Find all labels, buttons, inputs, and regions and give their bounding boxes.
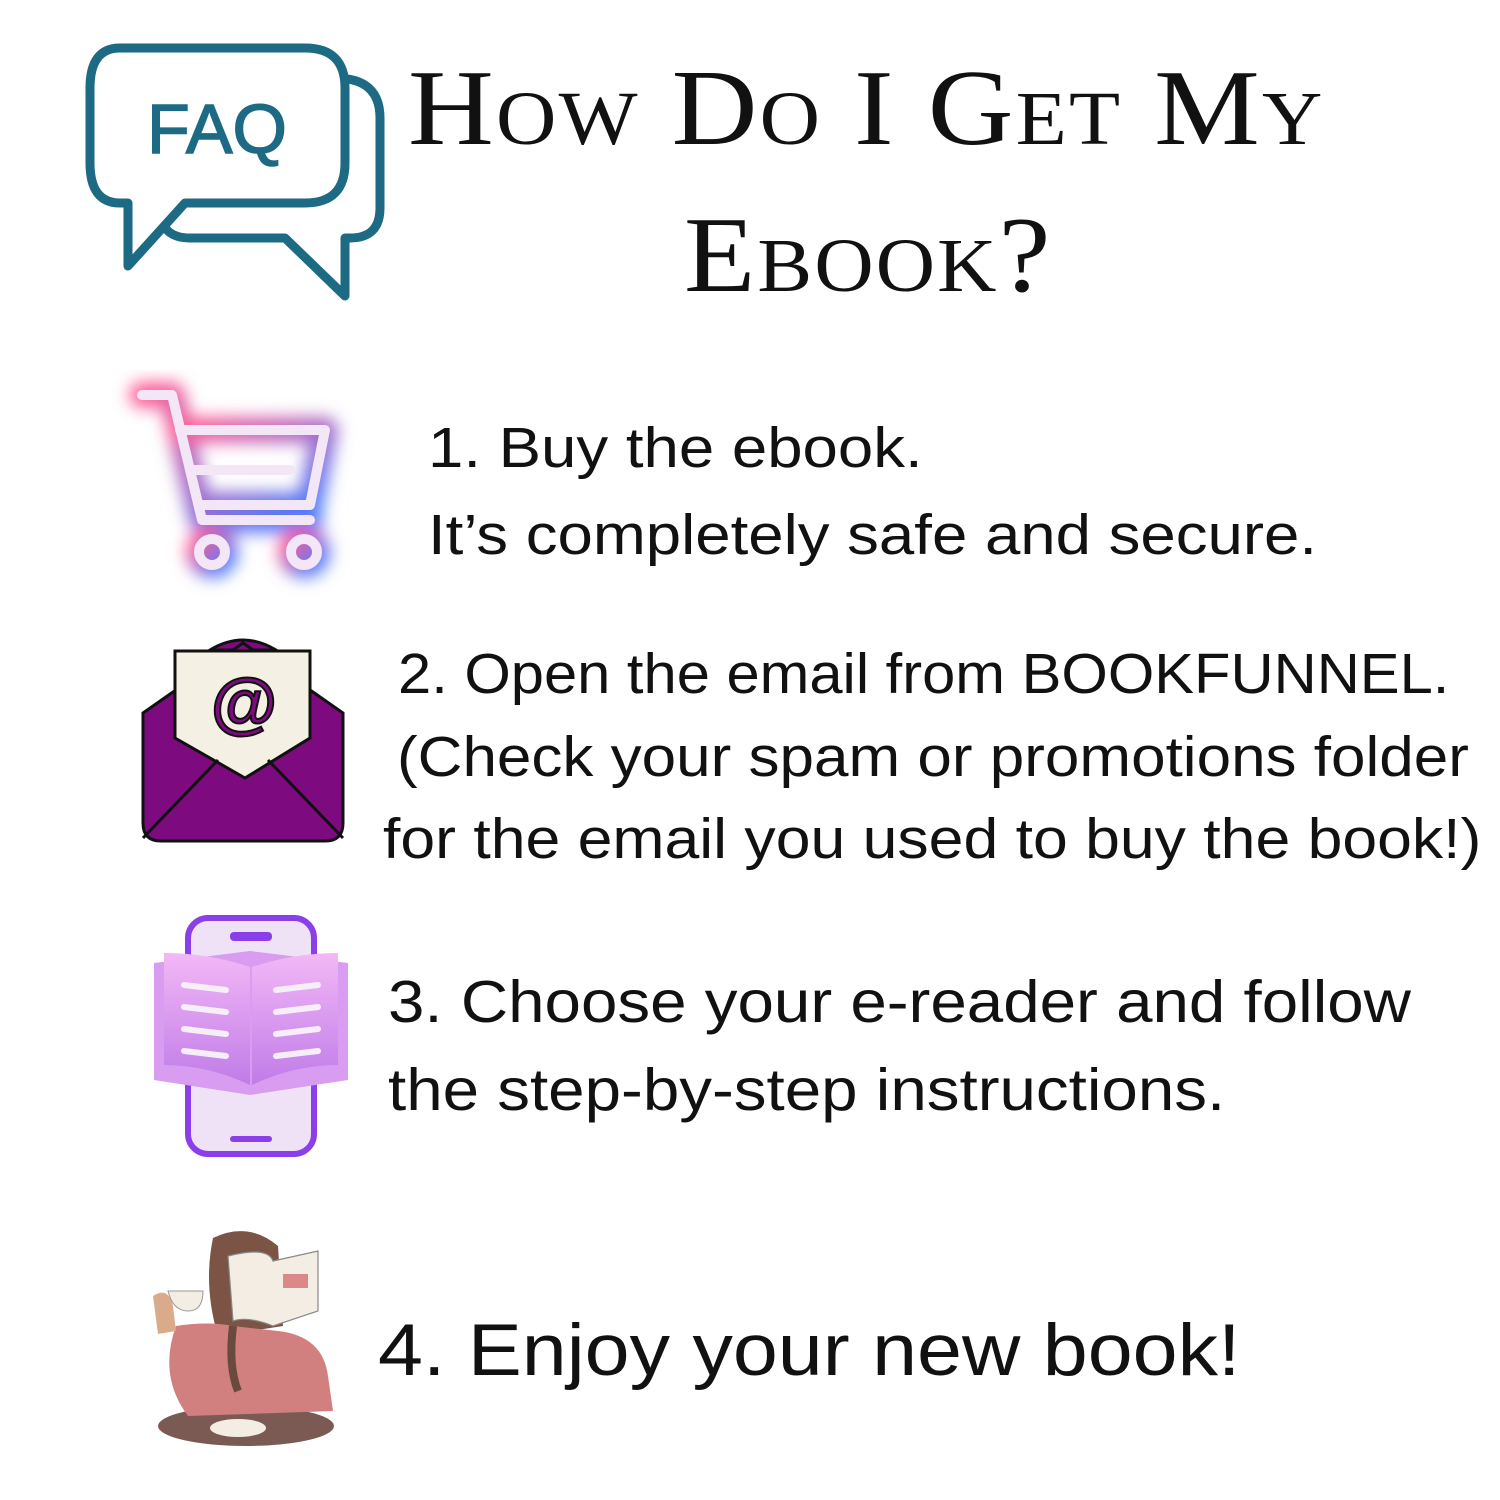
text: the step-by-step instructions. <box>388 1057 1225 1123</box>
text: for the email you used to buy the book!) <box>383 807 1481 871</box>
text: Ebook? <box>684 196 1053 315</box>
icon: phone with open book <box>154 915 348 1157</box>
text: step 3: 3. Choose your e-reader and follow <box>388 969 1411 1035</box>
icon: neon shopping cart <box>118 370 349 590</box>
text: (Check your spam or promotions folder <box>397 725 1469 789</box>
icon: FAQ speech bubbles <box>86 44 384 300</box>
text: step 1: 1. Buy the ebook. <box>428 416 923 480</box>
title: How Do I Get My <box>408 49 1325 168</box>
icon: woman reading <box>153 1231 334 1446</box>
icon: envelope <box>142 638 344 842</box>
icon: FAQ speech bubbles: FAQ <box>147 90 287 168</box>
text: It’s completely safe and secure. <box>428 503 1317 567</box>
text: step 2: 2. Open the email from BOOKFUNNEL. <box>398 642 1449 706</box>
text: step 4: 4. Enjoy your new book! <box>378 1310 1240 1391</box>
icon: envelope: @ <box>211 665 277 741</box>
